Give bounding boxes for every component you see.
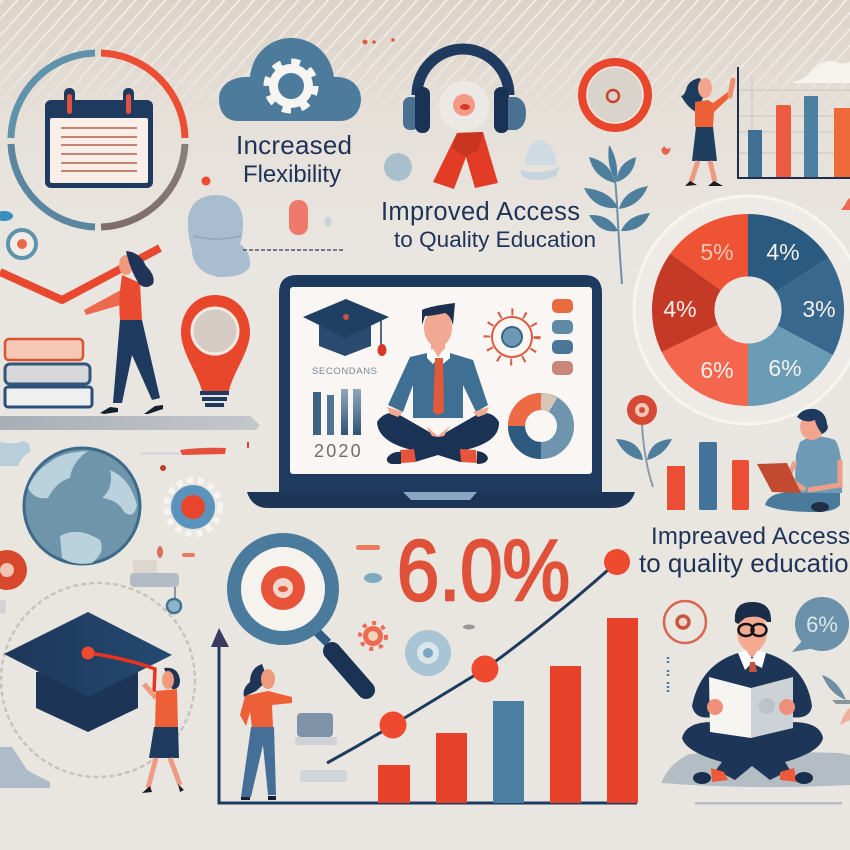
sun gear icon	[487, 312, 537, 362]
icon: headphones with ribbon	[403, 49, 526, 189]
figure: person with laptop	[757, 409, 842, 512]
seated man	[377, 303, 499, 464]
faded decorative icons top	[384, 140, 850, 210]
statistic: 6.0%: 6.0%	[397, 523, 570, 619]
heading: improved access	[381, 198, 596, 252]
icon: graduation cap on screen	[303, 299, 389, 356]
donut chart: 6%	[768, 355, 802, 381]
donut chart: 4%	[766, 239, 800, 265]
screen bars and year	[312, 366, 377, 461]
bar chart with trend line	[211, 549, 638, 803]
figure: woman at chart	[681, 78, 733, 186]
speech bubble	[792, 597, 849, 652]
icon: faded brain	[188, 195, 250, 277]
shelf	[0, 416, 260, 430]
donut chart: 5%	[700, 239, 734, 265]
cloud bottom left	[0, 747, 50, 788]
icon: red target lower right	[664, 601, 706, 693]
heading: improved access: Improved Access	[381, 198, 580, 226]
magnifier	[234, 540, 366, 690]
leaf lower right	[822, 675, 850, 725]
small laptop icon and shadow	[295, 713, 347, 782]
bar chart: top right	[738, 61, 850, 178]
laptop	[247, 275, 635, 508]
globe	[24, 448, 140, 564]
heading: increased flexibility	[236, 130, 352, 188]
screen bars and year: 2020	[314, 441, 363, 461]
heading: improved access repeat	[639, 523, 850, 578]
small decorative icons lower left	[0, 546, 195, 614]
icon: red target	[578, 58, 652, 132]
large graduation cap with ring	[1, 583, 195, 777]
figure: woman pulling red arrow	[0, 248, 163, 414]
heading: improved access repeat: Impreaved Access	[651, 523, 850, 550]
heading: increased flexibility: Flexibility	[243, 161, 341, 188]
screen donut	[516, 402, 566, 450]
figure: woman under cap	[142, 668, 184, 793]
icon: calendar in ring	[11, 53, 185, 227]
icon: red lightbulb	[181, 295, 250, 405]
donut chart	[634, 196, 850, 424]
speech bubble: 6%	[806, 612, 838, 637]
icon: plant	[584, 145, 650, 284]
small gears middle	[356, 545, 475, 676]
small icon column	[552, 299, 573, 375]
icon: cloud with gear	[219, 38, 361, 121]
small decorative icons left	[0, 176, 210, 258]
donut chart: 3%	[802, 296, 836, 322]
icon: gear badge	[166, 480, 220, 534]
donut chart: 6%	[700, 357, 734, 383]
faded smudges below shelf	[0, 441, 249, 471]
donut chart: 4%	[663, 296, 697, 322]
figure: man reading	[661, 602, 850, 804]
icon: books stack	[5, 339, 92, 407]
figure: woman pointing	[240, 664, 292, 800]
red pill and dashed line	[243, 200, 345, 250]
top red dots	[362, 38, 395, 44]
heading: increased flexibility: Increased	[236, 130, 352, 160]
flower plant and small bars	[616, 395, 749, 510]
heading: improved access: to Quality Education	[394, 227, 596, 252]
screen bars and year: SECONDANS	[312, 366, 377, 377]
